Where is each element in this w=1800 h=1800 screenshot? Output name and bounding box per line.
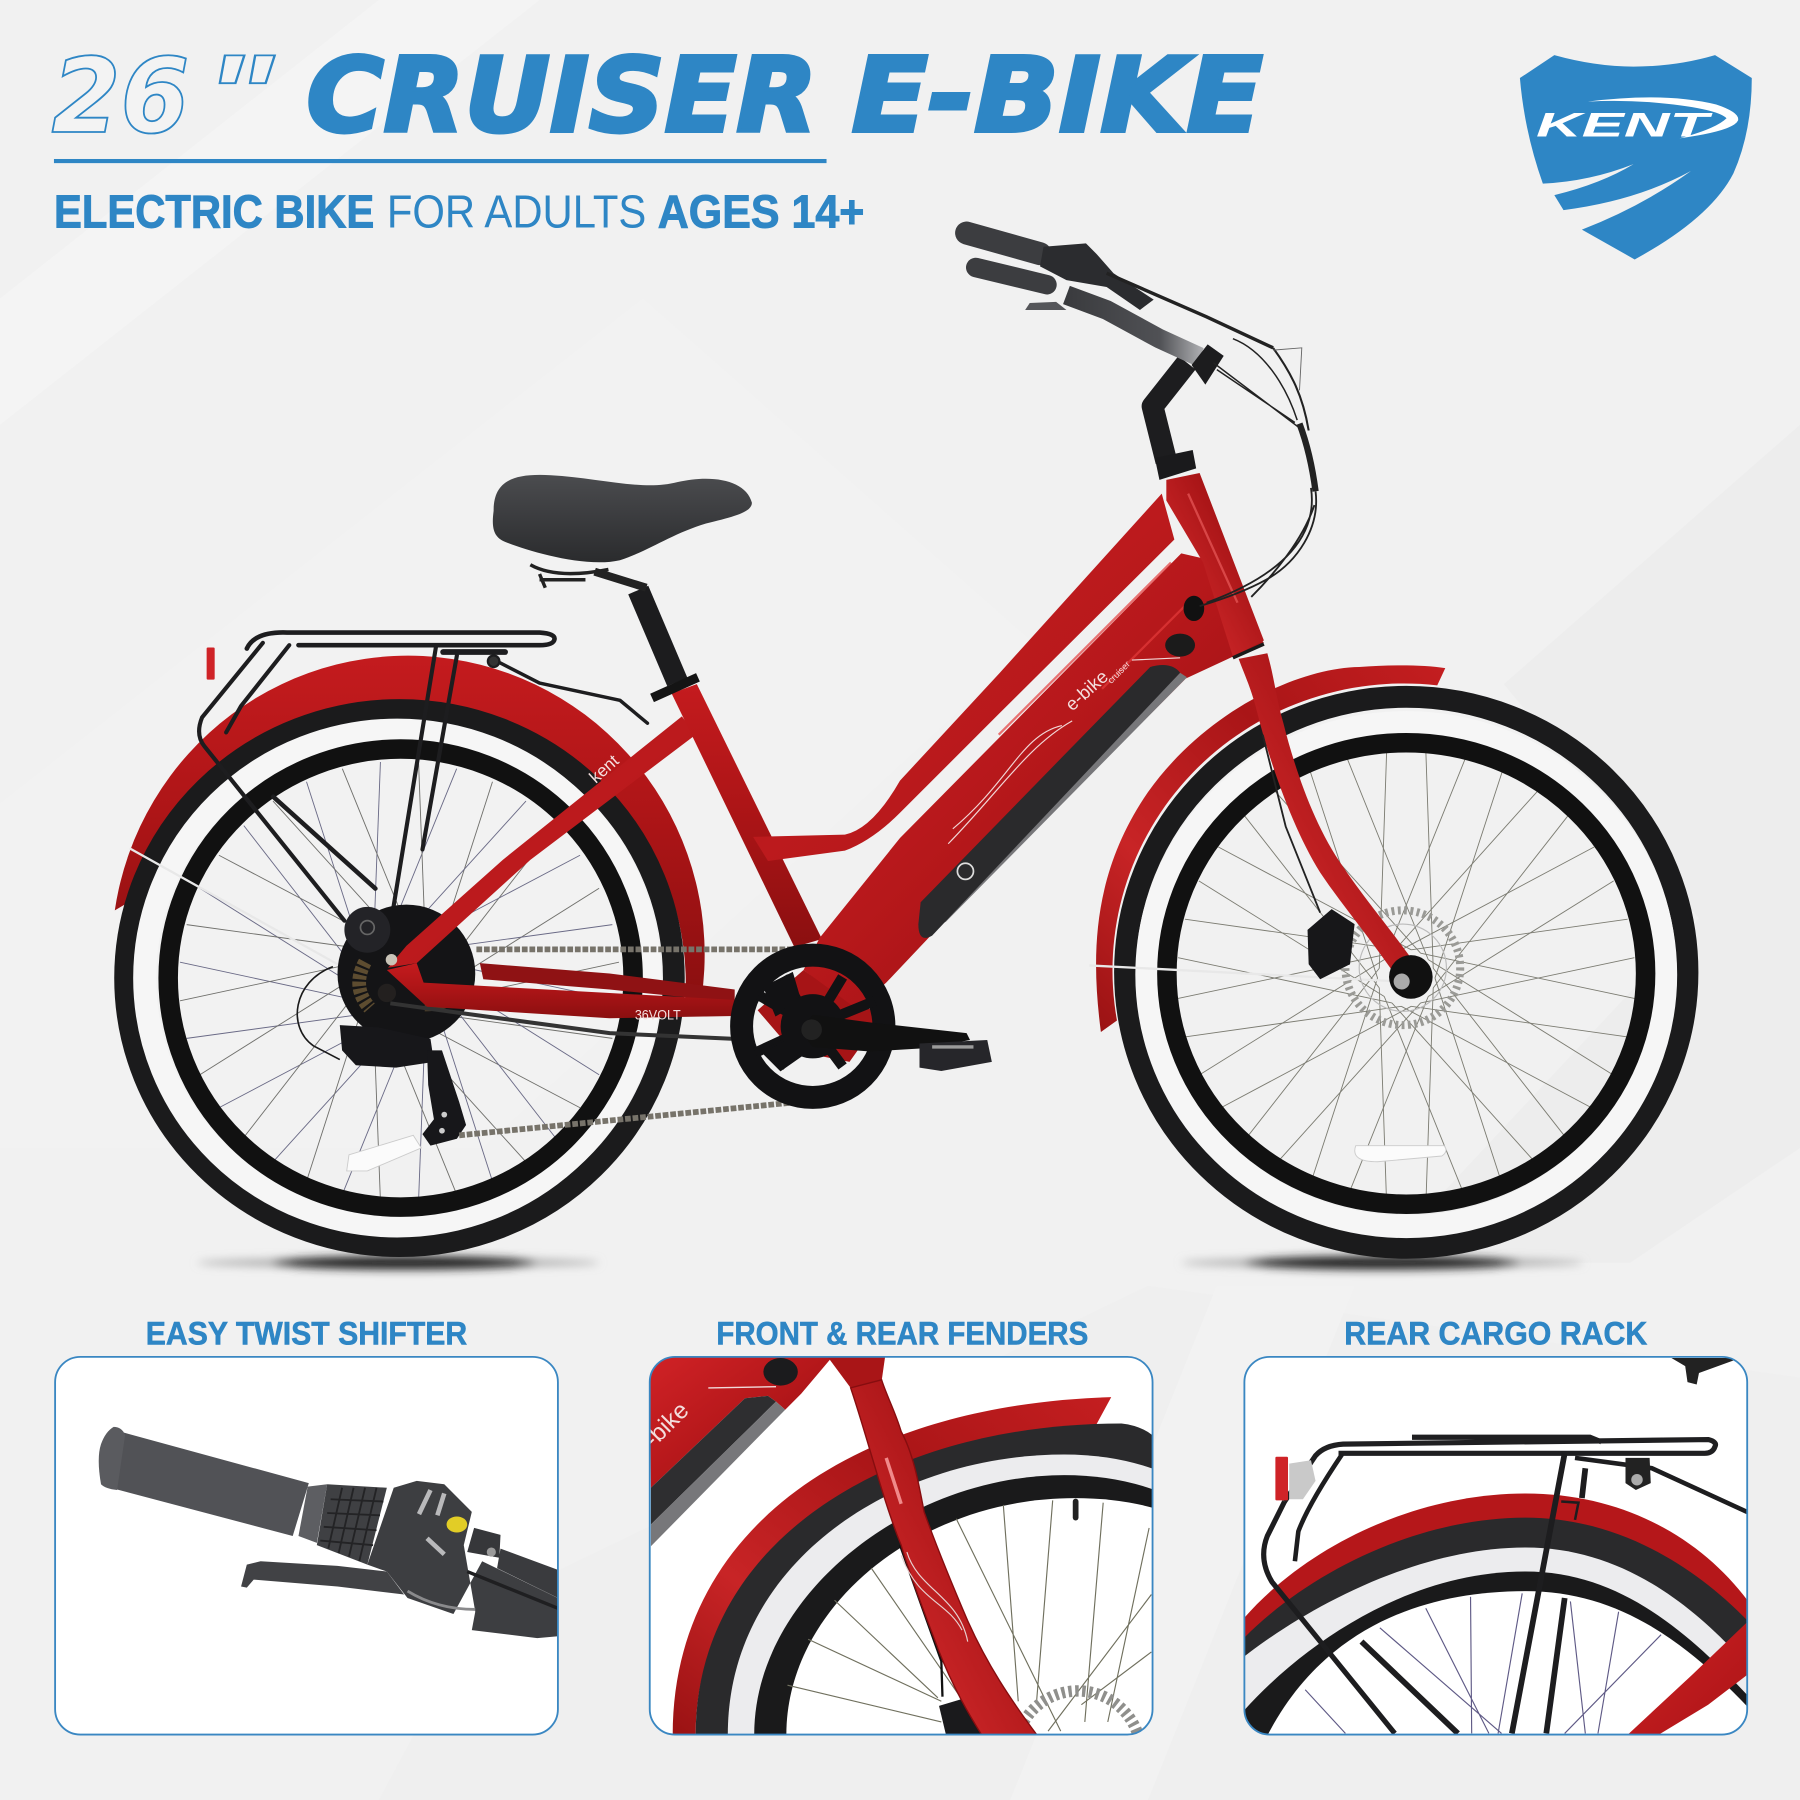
logo: Kent shield: KENT [1536, 107, 1714, 145]
frame decal lines [948, 658, 1180, 844]
panel: cargo rack [1234, 1357, 1756, 1745]
title: product name first word: CRUISER [307, 37, 817, 156]
subtitle: FOR ADULTS [387, 185, 646, 237]
ground shadows [197, 1256, 1583, 1270]
fork crown [828, 1357, 885, 1388]
handlebar clamp [1192, 344, 1224, 385]
brake hose [900, 1545, 942, 1697]
rim [754, 1475, 1155, 1735]
seat post [638, 590, 677, 682]
frame text: 36VOLT [635, 1007, 681, 1022]
rear spokes [110, 699, 689, 1264]
front fender [673, 1397, 1111, 1735]
battery grey strip [925, 673, 1187, 932]
seat stay [1628, 1622, 1747, 1735]
cassette [338, 905, 475, 1042]
rack bracket [1626, 1458, 1651, 1490]
seat [493, 475, 752, 562]
rack arm [1264, 1502, 1395, 1733]
bike illustration [110, 233, 1708, 1272]
lever body [241, 1561, 404, 1595]
brake lever [1025, 302, 1066, 310]
head tube highlight [1188, 494, 1238, 603]
brake disc [1023, 1685, 1142, 1734]
handlebar [1066, 295, 1200, 357]
white sidewall [728, 1454, 1155, 1735]
feature heading: easy twist shifter: EASY TWIST SHIFTER [146, 1314, 467, 1351]
shifter rib grid [320, 1488, 383, 1561]
brake disc [1345, 910, 1460, 1025]
subtitle [54, 185, 864, 237]
top tube [753, 494, 1174, 861]
feature heading: front and rear fenders: FRONT & REAR FENDERS [716, 1314, 1088, 1351]
shifter housing and brake body [367, 1481, 562, 1638]
bottom bracket lug [758, 970, 886, 1062]
grip end flange [99, 1427, 125, 1490]
tyre tread [696, 1423, 1155, 1735]
cables [1107, 273, 1316, 606]
front wheel [1125, 697, 1688, 1248]
down tube [804, 553, 1264, 1010]
front brake caliper [1308, 909, 1355, 979]
handlebar end [497, 1548, 557, 1598]
rear brake cable loop [297, 967, 340, 1060]
battery port [763, 1358, 798, 1386]
fender hook [1561, 1502, 1578, 1520]
fork highlight [886, 1458, 901, 1504]
rear axle nuts [378, 954, 397, 1002]
yellow indicator [447, 1516, 467, 1533]
rack platform [1285, 1437, 1716, 1502]
title: inch marks: " [204, 31, 275, 156]
frame text [585, 659, 1132, 1022]
front spokes [1105, 684, 1708, 1272]
rear wheel [125, 710, 674, 1246]
frame text: e-bike [1061, 666, 1112, 715]
rear fender [1234, 1493, 1756, 1745]
wheel interior [1263, 1591, 1756, 1745]
feature heading: rear cargo rack: REAR CARGO RACK [1344, 1314, 1648, 1351]
front hub [1389, 955, 1433, 999]
bar clamp [467, 1528, 501, 1558]
clamp screw [487, 1547, 496, 1557]
seat stay [388, 716, 696, 968]
seat clamp and rails [530, 565, 646, 588]
stem collar [1155, 450, 1196, 480]
title: product name second word: E-BIKE [852, 37, 1263, 156]
wheel interior [786, 1498, 1155, 1735]
chain [459, 949, 798, 1135]
battery [918, 665, 1180, 938]
seat clamp [652, 677, 698, 698]
battery [651, 1396, 776, 1524]
head tube [1166, 473, 1264, 657]
decal text: -bike [638, 1397, 694, 1453]
fender stays [130, 848, 1401, 987]
subtitle: AGES 14+ [658, 185, 864, 237]
title [52, 31, 1263, 157]
rack bolt [1631, 1474, 1643, 1485]
grip collar [298, 1484, 327, 1543]
brake caliper [939, 1700, 980, 1734]
brake hose [1263, 735, 1320, 913]
grip body [115, 1433, 309, 1536]
far chain stay [480, 963, 735, 1002]
rack struts [1361, 1453, 1585, 1733]
lever pivot arc [408, 1591, 475, 1609]
twist shifter [1040, 243, 1154, 310]
fork [851, 1380, 1037, 1735]
derailleur cable [390, 1003, 735, 1039]
seat tube [672, 684, 822, 947]
subtitle: ELECTRIC BIKE [54, 185, 374, 237]
chain stay [387, 963, 735, 1018]
reflector bracket [1289, 1460, 1316, 1499]
fork pinstripes [901, 1552, 968, 1642]
rear fender [115, 656, 705, 999]
front wheel reflector [1355, 1146, 1446, 1162]
panel: twist shifter [55, 1357, 562, 1735]
tyre tread [1234, 1518, 1756, 1745]
rack [199, 632, 647, 926]
shifter ribs [317, 1484, 387, 1565]
stem [1153, 363, 1187, 461]
down tube [650, 1357, 832, 1488]
seat rail fragment [1671, 1358, 1740, 1384]
rack reflector [207, 647, 215, 680]
battery lock and ports [957, 596, 1204, 879]
battery strip [651, 1402, 785, 1546]
reflector [1275, 1457, 1288, 1500]
rack brace [1575, 1458, 1749, 1513]
rear wheel reflector [347, 1135, 421, 1171]
tube highlights [999, 562, 1194, 735]
panel: fenders [638, 1357, 1155, 1754]
logo: Kent shield [1520, 55, 1752, 259]
decal line [708, 1387, 776, 1388]
brake cable [467, 1572, 558, 1608]
brake valve [1073, 1502, 1078, 1518]
front fender [1096, 665, 1445, 1032]
title divider [54, 159, 827, 163]
white sidewall [1234, 1547, 1756, 1745]
frame text: kent [585, 750, 623, 787]
spokes [788, 1500, 1151, 1731]
second arm [1295, 1454, 1342, 1561]
crank and pedal [800, 1015, 992, 1071]
title: outlined size: 26 [52, 37, 189, 157]
rear derailleur [340, 1025, 466, 1146]
lower grip [976, 267, 1047, 285]
silver trim [419, 1490, 444, 1554]
fork crown ring [1233, 644, 1264, 658]
chainring [742, 955, 884, 1097]
upper grip [967, 233, 1040, 254]
frame text: cruiser [1106, 659, 1132, 686]
rim [1234, 1572, 1756, 1745]
fork [1239, 653, 1420, 985]
spokes [1305, 1593, 1661, 1733]
